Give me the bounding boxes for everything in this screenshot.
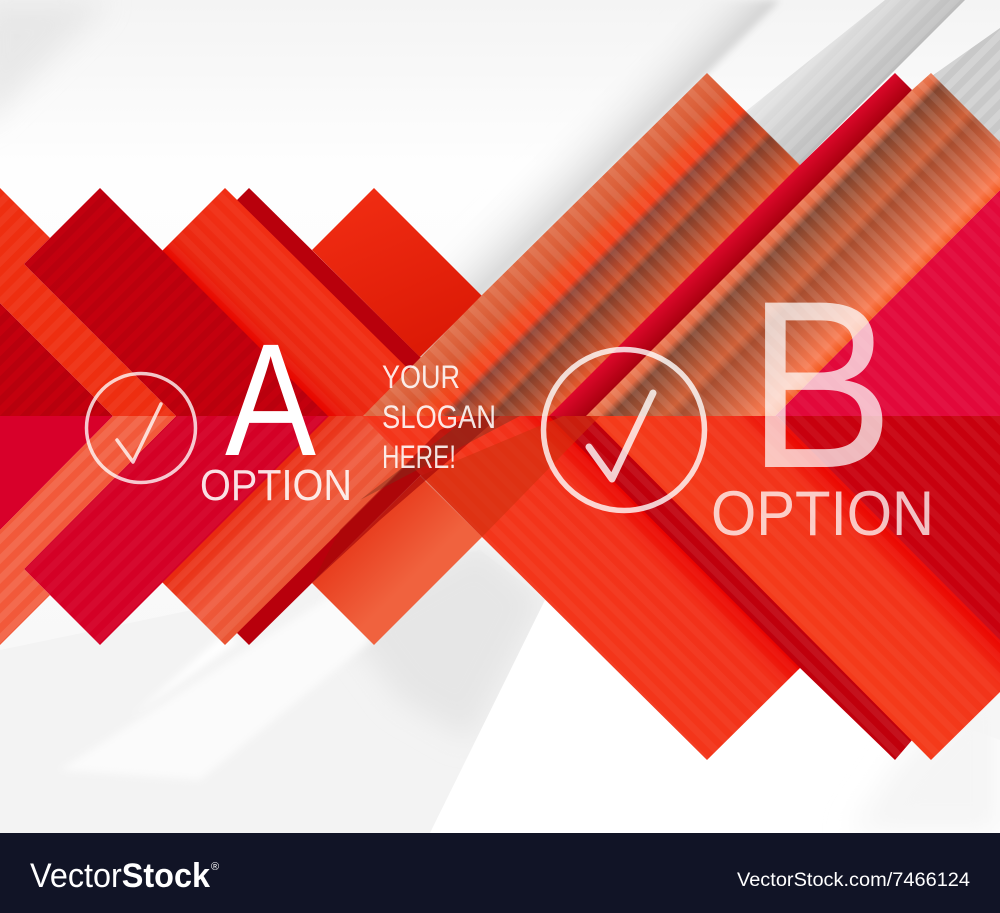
central crossing overlay	[312, 416, 600, 583]
option B check icon	[544, 350, 704, 510]
right arrow group upper half	[363, 73, 1000, 416]
footer logo: VectorStock	[30, 857, 210, 895]
right arrow group lower half	[362, 416, 1000, 760]
registered mark: ®	[211, 861, 219, 873]
footer bar	[0, 833, 1000, 913]
option B label: OPTION	[711, 479, 934, 549]
option A label: OPTION	[200, 461, 352, 510]
option A letter: A	[225, 310, 316, 489]
option A check icon	[86, 374, 196, 482]
slogan text: HERE!	[382, 439, 456, 475]
option B letter: B	[747, 251, 894, 518]
left arrow group lower half	[0, 416, 482, 645]
slogan text: SLOGAN	[382, 399, 496, 435]
left arrow group upper half	[0, 188, 482, 416]
footer image id: VectorStock.com/7466124	[737, 870, 970, 891]
slogan text	[382, 359, 496, 475]
slogan text: YOUR	[382, 359, 460, 395]
